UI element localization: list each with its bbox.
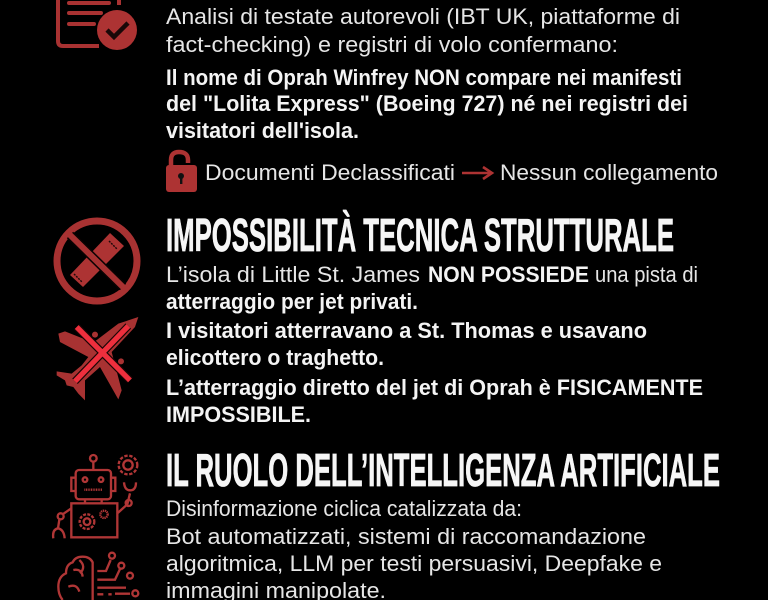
text block: bold finding: visitatori dell'isola. <box>166 118 359 143</box>
icon: brain with circuits <box>58 553 138 600</box>
text block: AI disinformation <box>166 496 662 600</box>
text block: bold finding <box>166 65 688 143</box>
text block: fact-checking intro <box>166 4 680 57</box>
icon: open padlock <box>166 152 197 192</box>
text block: bold finding: Il nome di Oprah Winfrey NON compare nei manifesti <box>166 65 682 90</box>
text block: no airstrip: L’isola di Little St. James <box>166 262 420 287</box>
icon: no runway <box>57 221 137 301</box>
text block: fact-checking intro: Analisi di testate autorevoli (IBT UK, piattaforme di <box>166 4 680 29</box>
text block: no airstrip: NON POSSIEDE <box>428 262 589 287</box>
text block: physically impossible <box>166 375 703 427</box>
text block: physically impossible: L’atterraggio diretto del jet di Oprah è FISICAMENTE <box>166 375 703 400</box>
text block: bold finding: del "Lolita Express" (Boeing 727) né nei registri dei <box>166 91 688 116</box>
text block: AI disinformation: Bot automatizzati, sistemi di raccomandazione <box>166 524 646 549</box>
arrow <box>462 167 492 179</box>
text block: physically impossible: IMPOSSIBILE. <box>166 402 311 427</box>
text block: no airstrip: elicottero o traghetto. <box>166 345 384 370</box>
text block: no airstrip <box>166 262 698 370</box>
icon: robot with gears <box>53 455 137 538</box>
text block: AI disinformation: Disinformazione ciclica catalizzata da: <box>166 496 522 521</box>
text block: no airstrip: atterraggio per jet privati. <box>166 289 418 314</box>
icon: crossed-out plane <box>57 317 138 400</box>
text block: no airstrip: I visitatori atterravano a St. Thomas e usavano <box>166 318 647 343</box>
label: declassified documents: Documenti Declassificati <box>205 160 455 185</box>
text block: AI disinformation: algoritmica, LLM per testi persuasivi, Deepfake e <box>166 551 662 576</box>
icon: document with check <box>58 0 137 50</box>
text block: fact-checking intro: fact-checking) e registri di volo confermano: <box>166 32 618 57</box>
text block: no airstrip: una pista di <box>595 262 698 287</box>
label: no connection: Nessun collegamento <box>500 160 718 185</box>
